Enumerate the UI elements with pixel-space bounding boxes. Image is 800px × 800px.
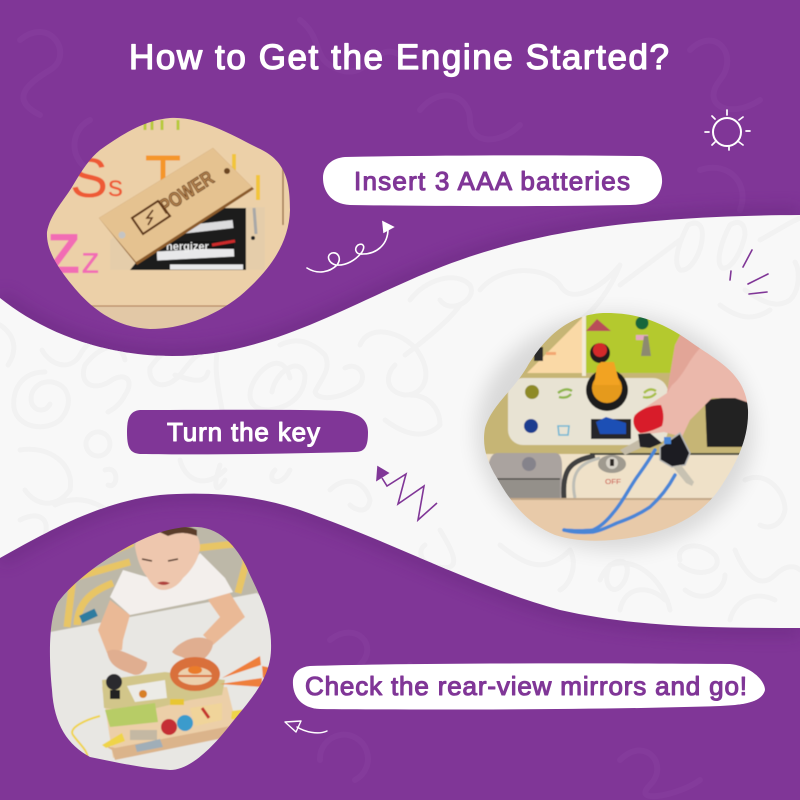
pill: step 2 (127, 410, 368, 454)
icon: zigzag arrow (377, 467, 437, 520)
photo: turning the key (484, 313, 748, 541)
shirt (110, 553, 233, 615)
black box at right (704, 398, 748, 448)
child arms (98, 600, 130, 653)
head (135, 526, 200, 590)
background doodles on white (42, 343, 448, 570)
photo: battery compartment: POWER (156, 167, 218, 218)
pill: step 1: Insert 3 AAA batteries (354, 166, 630, 196)
pill: step 2: Turn the key (167, 417, 320, 447)
white wave band (0, 215, 800, 628)
printed letters (50, 155, 180, 274)
screw (254, 208, 256, 234)
blue lanyard (564, 450, 675, 532)
pill: step 1 (323, 155, 662, 206)
icon: small left arrow (285, 721, 327, 733)
battery compartment (110, 207, 265, 270)
icon: loopy arrow (307, 222, 393, 272)
keys (620, 440, 642, 456)
photo: battery compartment (46, 118, 290, 329)
icon: purple burst lines (730, 250, 768, 294)
photo: turning the key: OFF (605, 479, 621, 486)
soft shadow behind key photo (477, 314, 753, 550)
printed letters: s (108, 170, 123, 203)
hand (634, 346, 748, 436)
printed letters: S (70, 146, 108, 209)
title: How to Get the Engine Started? (129, 38, 669, 77)
orange rays (222, 656, 261, 678)
eyes and mouth (142, 559, 178, 561)
photo: child playing (50, 526, 272, 770)
icon: sun (705, 110, 750, 150)
hands (107, 650, 147, 675)
shading along the wave edge (0, 215, 800, 628)
yellow chair (67, 543, 246, 627)
lower console (486, 453, 739, 499)
power plate (100, 186, 254, 266)
white switch panel (508, 378, 668, 445)
printed letters: z (81, 240, 100, 282)
pill: step 3: Check the rear-view mirrors and go! (305, 671, 747, 701)
printed letters: Z (47, 222, 80, 286)
white table (50, 592, 271, 770)
photo: battery compartment: nergizer (166, 241, 210, 253)
busy board (102, 687, 237, 758)
steering wheel (170, 657, 220, 691)
wooden edge (511, 500, 710, 541)
pill: step 3 (293, 663, 765, 710)
